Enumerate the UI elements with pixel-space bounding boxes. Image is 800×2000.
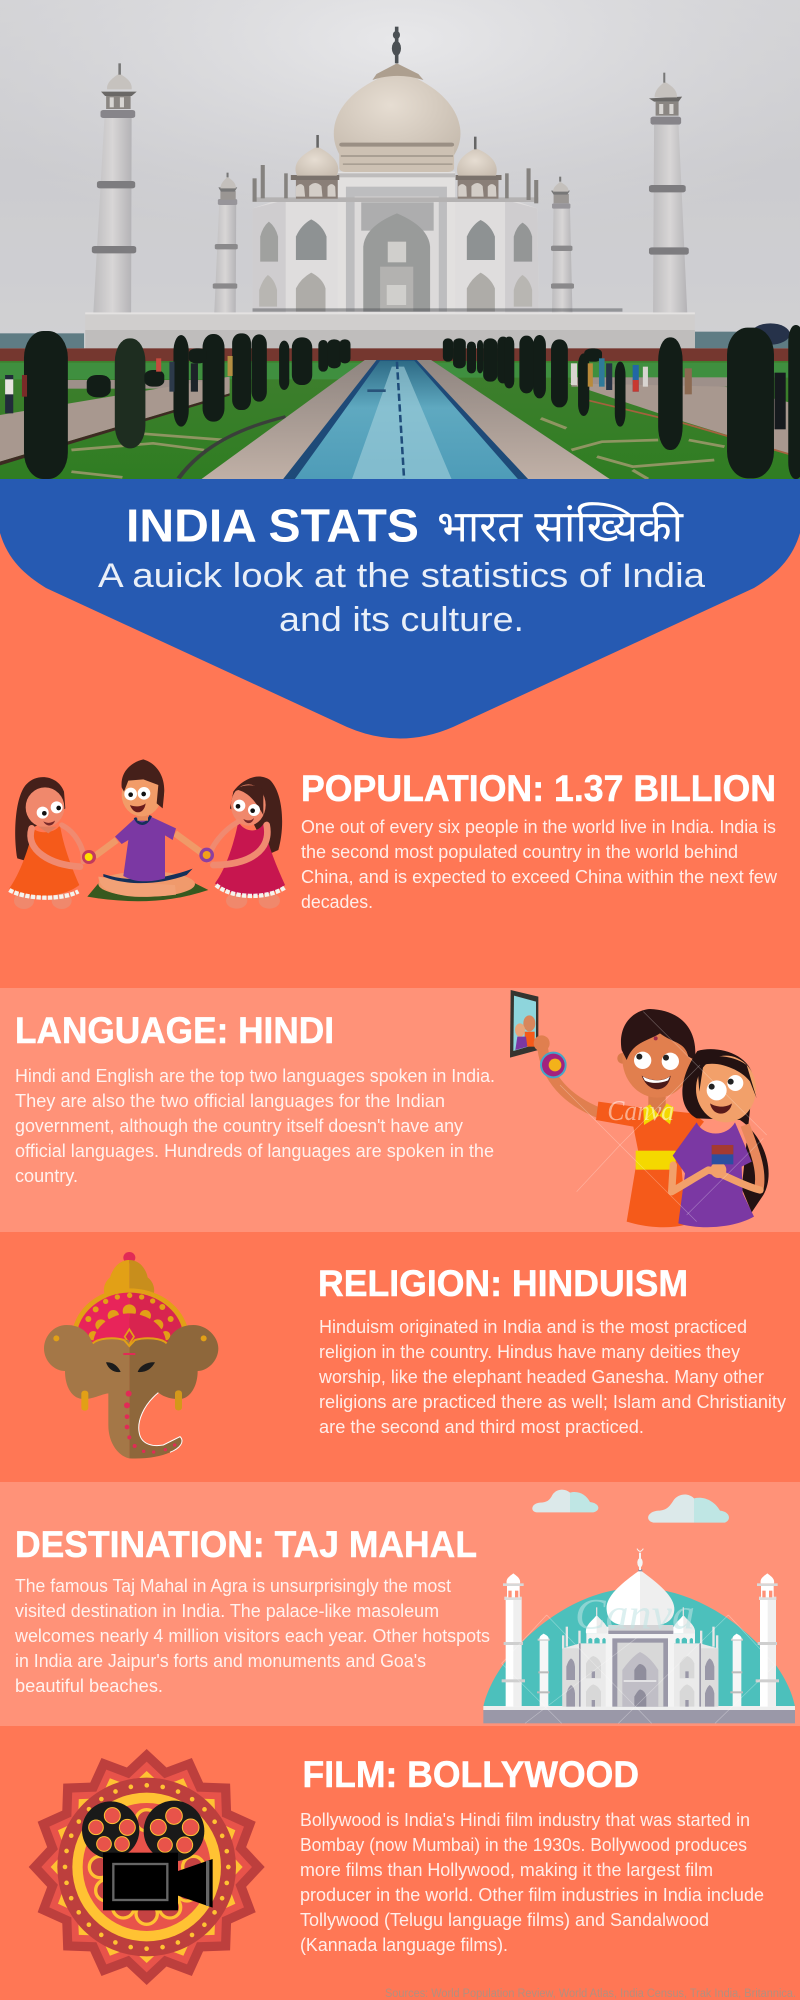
body text: in India are Jaipur's forts and monuments and Goa's bbox=[15, 1651, 426, 1671]
body text: government, although the country itself doesn't have any bbox=[15, 1116, 463, 1136]
body text: Hinduism originated in India and is the most practiced bbox=[319, 1317, 747, 1337]
camera body bbox=[103, 1853, 178, 1910]
girl arms bbox=[745, 1125, 760, 1192]
inner left minaret bbox=[214, 200, 236, 312]
illustration: three children with rakhi bbox=[9, 759, 285, 909]
heading: FILM: BOLLYWOOD bbox=[302, 1754, 639, 1795]
outer left minaret bbox=[93, 115, 132, 312]
panel: film bbox=[29, 1749, 796, 2000]
cypress trees bbox=[24, 325, 800, 479]
title in Hindi: भारत सांख्यिकी bbox=[437, 502, 685, 552]
rakhi box bbox=[712, 1145, 733, 1164]
pool bbox=[202, 360, 610, 479]
walkways bbox=[0, 377, 230, 462]
illustration: film camera on mandala bbox=[29, 1749, 265, 1985]
body text: beautiful beaches. bbox=[15, 1676, 163, 1696]
body text: religion in the country. Hindus have many deities they bbox=[319, 1342, 740, 1362]
body text: (Kannada language films). bbox=[300, 1935, 508, 1955]
main building bbox=[253, 197, 539, 312]
mat bbox=[87, 879, 208, 901]
body text bbox=[301, 817, 778, 912]
body text: decades. bbox=[301, 892, 373, 912]
body text: They are also the two official languages for the Indian bbox=[15, 1091, 445, 1111]
rakhi flowers bbox=[82, 850, 96, 864]
markings bbox=[123, 1353, 176, 1454]
building body bbox=[562, 1643, 718, 1707]
boy bbox=[95, 840, 117, 856]
body text: welcomes nearly 4 million visitors each year. Other hotspots bbox=[14, 1626, 490, 1646]
heading: LANGUAGE: HINDI bbox=[15, 1010, 334, 1051]
photo: Taj Mahal bbox=[0, 0, 800, 481]
panel: destination bbox=[0, 1482, 800, 1726]
boy arm bbox=[543, 1048, 600, 1113]
body text: Hindi and English are the top two languages spoken in India. bbox=[15, 1066, 495, 1086]
body text: more films than Hollywood, making it the largest film bbox=[300, 1860, 713, 1880]
body text bbox=[15, 1066, 495, 1186]
panel: population bbox=[9, 759, 778, 912]
subtitle: A auick look at the statistics of India bbox=[98, 557, 705, 595]
main dome bbox=[334, 63, 460, 157]
head, right half bbox=[129, 1325, 218, 1458]
outer right minaret bbox=[653, 125, 687, 312]
rakhi bbox=[540, 1052, 567, 1078]
body text: Bombay (now Mumbai) in the 1930s. Bollywood produces bbox=[300, 1835, 747, 1855]
lawns bbox=[0, 361, 800, 481]
illustration: Ganesha bbox=[44, 1252, 218, 1458]
base bbox=[483, 1706, 795, 1710]
cloud left bbox=[532, 1490, 570, 1512]
heading: RELIGION: HINDUISM bbox=[318, 1263, 688, 1304]
side spires and small domes bbox=[261, 165, 265, 198]
girl hair bbox=[682, 1049, 769, 1212]
main dome bbox=[607, 1570, 640, 1627]
girl face bbox=[696, 1056, 756, 1122]
subtitle bbox=[98, 557, 705, 639]
right girl bbox=[230, 776, 282, 853]
small spires bbox=[566, 1627, 568, 1647]
body text bbox=[14, 1576, 490, 1696]
inner minarets bbox=[540, 1640, 548, 1707]
plinth bbox=[85, 312, 695, 349]
crown bbox=[123, 1252, 135, 1263]
body text: visited destination in India. The palace-like masoleum bbox=[15, 1601, 439, 1621]
chhatris bbox=[586, 1633, 608, 1643]
body text bbox=[318, 1317, 786, 1437]
ear dots and earrings bbox=[53, 1335, 59, 1341]
outer minarets bbox=[506, 1597, 521, 1707]
inner right minaret bbox=[552, 205, 572, 312]
heading: POPULATION: 1.37 BILLION bbox=[301, 768, 776, 809]
title: INDIA STATS bbox=[126, 500, 419, 552]
body text: Tollywood (Telugu language films) and Sandalwood bbox=[300, 1910, 709, 1930]
watermark: Canva bbox=[575, 1590, 695, 1638]
side arches bbox=[566, 1658, 575, 1680]
watermark lines bbox=[560, 1012, 767, 1222]
girl dress bbox=[673, 1122, 754, 1227]
lawn pattern bbox=[71, 418, 724, 479]
body text: China, and is expected to exceed China within the next few bbox=[301, 867, 778, 887]
body text: worship, like the elephant headed Ganesha. Many other bbox=[318, 1367, 764, 1387]
subtitle: and its culture. bbox=[279, 601, 524, 639]
body text: The famous Taj Mahal in Agra is unsurprisingly the most bbox=[15, 1576, 451, 1596]
mandala bbox=[29, 1749, 265, 1985]
header banner bbox=[0, 479, 800, 738]
body text: Bollywood is India's Hindi film industry that was started in bbox=[300, 1810, 750, 1830]
left girl bbox=[15, 777, 65, 862]
head, left half bbox=[44, 1325, 129, 1458]
red wall bbox=[0, 348, 800, 361]
teal semicircle bbox=[483, 1588, 795, 1707]
body text: religions are practiced there as well; Islam and Christianity bbox=[319, 1392, 786, 1412]
illustration: Taj Mahal with clouds bbox=[483, 1490, 795, 1723]
panel: religion bbox=[44, 1252, 786, 1458]
body text: country. bbox=[15, 1166, 78, 1186]
people on terrace bbox=[253, 308, 622, 312]
cloud right bbox=[648, 1495, 694, 1523]
blue banner shape bbox=[0, 479, 800, 738]
body text bbox=[300, 1810, 764, 1955]
watermark lines bbox=[502, 1615, 775, 1723]
phone bbox=[510, 990, 538, 1058]
body text: official languages. Hundreds of languages are spoken in the bbox=[15, 1141, 494, 1161]
boy bbox=[596, 1102, 704, 1227]
eyes bbox=[106, 1362, 121, 1372]
body text: One out of every six people in the world live in India. India is bbox=[301, 817, 776, 837]
illustration: brother and sister selfie bbox=[510, 990, 769, 1227]
body text: the second most populated country in the world behind bbox=[301, 842, 738, 862]
body text: are the second and third most practiced. bbox=[319, 1417, 644, 1437]
visitors bbox=[5, 356, 786, 429]
camera reels bbox=[82, 1801, 139, 1859]
watermark: Canva bbox=[607, 1096, 674, 1127]
panel: language bbox=[0, 988, 800, 1232]
heading: DESTINATION: TAJ MAHAL bbox=[15, 1524, 477, 1565]
body text: producer in the world. Other film industries in India include bbox=[300, 1885, 764, 1905]
